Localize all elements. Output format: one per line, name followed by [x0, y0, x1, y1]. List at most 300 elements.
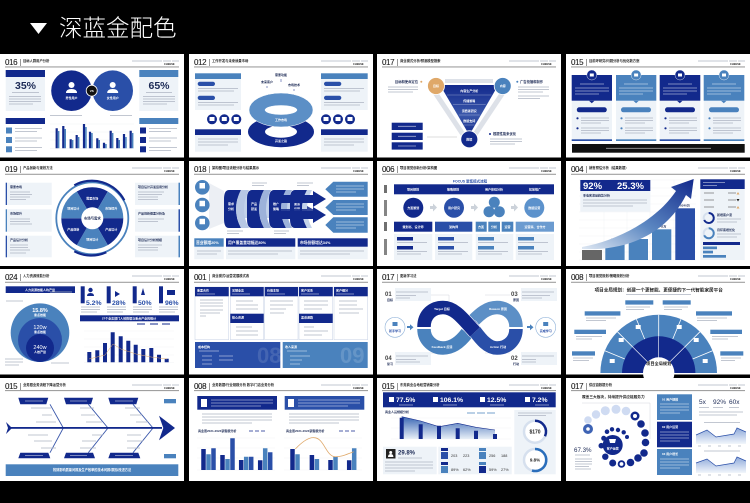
stats box: 25.3% [617, 181, 644, 192]
chart: right: 商业周2021-2024销售额分析 [286, 428, 324, 433]
header [382, 273, 556, 283]
metrics: 营业额增20% [196, 240, 219, 245]
drums: 分析 [228, 206, 234, 211]
step 02: 02 [511, 356, 518, 362]
triangle: 消费者研究 [462, 108, 477, 113]
revenue box: 收入来源 [285, 344, 297, 349]
step 01 [385, 288, 431, 302]
bars row: 架构师 [449, 224, 458, 229]
loop labels: Target 目标 [434, 306, 450, 311]
cards: right: 项目设计开发运用分析 [138, 184, 168, 189]
gridlines [579, 180, 696, 260]
header: CHEESE [164, 277, 175, 281]
stat: 67.3 [574, 447, 592, 469]
nested circles: 15.8% [32, 308, 48, 314]
wheel: 产品设计 [105, 226, 117, 231]
triangle [440, 85, 498, 135]
end node: 完成学习 [540, 328, 552, 333]
area chart: 商业人员规模分析 [385, 409, 409, 414]
drums: 策略 [273, 206, 279, 211]
triangle frame [431, 79, 507, 139]
header [194, 58, 368, 67]
list: right [139, 118, 178, 152]
metrics: 市场份额增达34% [300, 240, 331, 245]
donut panel [514, 410, 556, 474]
bar chart: 9240万 [680, 204, 690, 208]
drums: 渠道 [294, 201, 300, 206]
panel: 001 business model [189, 269, 373, 374]
column labels: 渠道通路 [301, 314, 313, 320]
header: CHEESE [730, 62, 741, 66]
step 04: 04 [385, 356, 392, 362]
panel: 015 dashboard [377, 378, 561, 481]
fishbone [6, 404, 175, 453]
end node [536, 317, 556, 337]
title [30, 15, 176, 41]
circle: female users: 女性用户 [107, 95, 119, 100]
panel: 016 user profile [0, 54, 184, 158]
wheel [56, 181, 128, 256]
stats: 60x [729, 399, 740, 406]
bar chart: 7242万 [657, 224, 666, 228]
nested circles: 120w [33, 325, 47, 331]
card: top left [195, 73, 241, 110]
text: left: 目标和使命定位 [395, 79, 419, 84]
funnel [209, 183, 224, 229]
row labels [384, 185, 387, 255]
wheel: 市场与需求 [84, 215, 101, 220]
column labels: 客户关系 [301, 288, 313, 292]
wheel: 市场提升 [105, 205, 117, 210]
drums: 运营 [294, 206, 300, 211]
circle: female users [92, 70, 133, 111]
stat tiles: 96% [165, 300, 179, 307]
header: CHEESE [164, 386, 175, 390]
nested circles: 重点效能 [34, 312, 46, 317]
column labels: 核心资源 [232, 314, 244, 320]
header [571, 58, 745, 67]
column 1 [572, 70, 612, 141]
column 2 [616, 70, 656, 141]
header: 008 [571, 273, 584, 282]
bar chart: 520万 [588, 246, 596, 250]
area chart [385, 409, 511, 439]
header bar: 项目规划 [407, 186, 419, 192]
panel: 017 infinity loop [377, 269, 561, 374]
highlight card: 29.8% [398, 450, 416, 456]
bars row: 运营商、合作方 [524, 224, 546, 229]
drums: 产品 [251, 201, 257, 206]
conclusion bar [6, 464, 178, 476]
header: 销售预估分析（结果数据） [589, 165, 629, 170]
header [194, 165, 368, 175]
triangle: 传播策略 [463, 98, 475, 103]
center node: 客户运营 [607, 446, 619, 450]
header: 目前环研究/问题分析与优化数方案 [589, 58, 640, 63]
text: left [388, 79, 422, 92]
header: 015 [382, 382, 395, 391]
header [571, 165, 745, 175]
header: 015 [571, 58, 584, 67]
heading bar: 人力资源效能人均产量 [25, 287, 55, 292]
dot spiral [598, 412, 649, 468]
card: steel bottom: 03 用户增长 [662, 451, 678, 456]
side panel: 新增客户流 [717, 212, 732, 217]
cards: right [135, 183, 180, 257]
card: male share: 35% [15, 80, 37, 92]
header: 017 [382, 58, 395, 67]
panel: 012 rings [189, 54, 373, 158]
card: navy middle [657, 422, 692, 447]
panel: 015 four columns [566, 54, 750, 158]
header [5, 58, 179, 67]
labels: ring tops [261, 72, 300, 91]
wheel: 项目设计 [67, 205, 79, 210]
header: 001 [194, 273, 207, 282]
panel: 018 process arrows [189, 161, 373, 266]
step 03: 原因 [513, 297, 519, 302]
callout: left [197, 396, 277, 410]
step 02: 行动 [513, 361, 519, 366]
header: 商业模式/运营发展模式表 [212, 273, 250, 278]
bar chart [84, 324, 174, 362]
triangle: 数据支持 [463, 118, 475, 123]
column labels: 价值主张 [267, 288, 279, 292]
bar chart: 4322万 [633, 234, 643, 238]
icon: down triangle [30, 23, 47, 34]
stat tiles: 50% [138, 300, 152, 307]
frame lines [417, 295, 510, 353]
header [5, 273, 179, 283]
list: left [6, 118, 45, 152]
metric grid: 89% [451, 468, 459, 472]
fan: 项目全局规划 [646, 360, 671, 367]
kpi bar: 12.5% [487, 397, 506, 404]
header: 东莞商业合地段营销量分析 [400, 382, 440, 387]
side panel: 月环客增长化 [717, 227, 735, 232]
cards: right: 产品创新概要分析及 [138, 210, 165, 216]
metric grid: 188 [501, 454, 507, 458]
circle: blue: 内容 [500, 83, 506, 88]
chart: right [284, 428, 362, 470]
column labels: 重要合作 [197, 288, 209, 292]
header [194, 273, 368, 283]
ring: lower [248, 116, 314, 147]
header: CHEESE [541, 169, 552, 173]
nested circles [11, 303, 69, 362]
heading: 深蓝金配色 [59, 15, 176, 41]
cost box: 成本结构 [198, 344, 210, 349]
notes [5, 292, 72, 365]
kpi bar: 106.1% [440, 397, 463, 404]
header: 024 [5, 273, 18, 282]
stat tiles [81, 286, 179, 312]
panel: 017 triangle [377, 54, 561, 158]
header: CHEESE [353, 169, 364, 173]
stat tiles: 28% [112, 300, 126, 307]
card: female share [139, 70, 178, 111]
header: CHEESE [541, 277, 552, 281]
arrows: gray [430, 204, 518, 212]
ring: lower: 开发之路 [275, 138, 287, 143]
header bar [394, 184, 554, 194]
metric grid: 27% [501, 468, 509, 472]
header: CHEESE [541, 62, 552, 66]
labels: ring tops: 未来客户 [261, 79, 273, 84]
panel: 008 bar charts [189, 378, 373, 481]
donut panel: 9.8% [530, 458, 540, 462]
cards: left: 市场提升 [10, 210, 22, 216]
buttons [392, 123, 423, 150]
text [202, 414, 359, 423]
arrow: growth [582, 179, 694, 249]
detail cells [394, 234, 554, 260]
header [382, 382, 556, 391]
header: 供应链数据分析 [589, 382, 613, 387]
header bar: 投放推广 [529, 186, 541, 192]
header [571, 273, 745, 283]
column 4 [704, 70, 744, 141]
step 04 [385, 352, 431, 366]
metric grid: 223 [463, 454, 469, 458]
arrows: small [407, 324, 534, 330]
loop labels: Feedback 反馈 [432, 344, 452, 349]
circle: male users [51, 70, 92, 111]
column labels: 客户细分 [336, 288, 348, 292]
card: navy middle: 02 用户运营 [662, 424, 678, 429]
header [571, 382, 745, 391]
stat tiles: 5.2% [86, 300, 102, 307]
chart: left [197, 428, 275, 470]
badge: vs [86, 85, 97, 96]
loop labels: Action 行动 [490, 344, 506, 349]
labels: ring tops: 需要功能 [275, 72, 287, 77]
cost box: 08 [257, 343, 281, 368]
panel: 004 sales growth [566, 161, 750, 266]
kpi bar: 7.2% [532, 397, 548, 404]
highlight card [383, 447, 437, 474]
text: right [516, 79, 549, 98]
circles: 数据运营 [528, 205, 540, 210]
header: 项目视觉规划/策略规划分析 [589, 273, 630, 278]
revenue box [283, 342, 368, 368]
cause text [28, 408, 148, 448]
panel: 019 market wheel [0, 161, 184, 266]
header: 017 [571, 382, 584, 391]
badge: vs: VS [90, 89, 94, 93]
panel: 015 fishbone [0, 378, 184, 481]
circles: inputs [195, 180, 210, 230]
header [382, 165, 556, 175]
metric grid: 203 [451, 454, 457, 458]
drums: 需求 [228, 201, 234, 206]
panel: 008 fan chart [566, 269, 750, 389]
nested circles: 重点效能 [34, 329, 46, 334]
start node [385, 317, 405, 337]
bars row [394, 222, 554, 232]
circles: 用户研究 [448, 205, 460, 210]
header: CHEESE [164, 169, 175, 173]
stats: 5x [699, 399, 707, 406]
column labels: 关键业务 [232, 288, 244, 292]
drums [224, 190, 312, 228]
header: 016 [5, 58, 18, 67]
ring: upper: 工作市场 [275, 117, 287, 122]
line chart: top [696, 422, 746, 446]
infinity loop [424, 308, 516, 348]
card: top right [321, 73, 368, 110]
kpi bar: 77.5% [396, 397, 415, 404]
step 04: 复习 [387, 361, 393, 366]
panel: 024 staffing [0, 269, 184, 374]
heading [595, 286, 723, 294]
bar chart [50, 116, 134, 148]
card: steel top: 01 用户规模 [662, 396, 678, 402]
header: CHEESE [353, 277, 364, 281]
bars row: 方案 [478, 224, 484, 229]
header bar: 用户体验分析 [485, 186, 503, 192]
header: 018 [194, 165, 207, 174]
labels: top and bottom [227, 183, 313, 234]
icons: right circles [321, 114, 355, 124]
header: CHEESE [353, 386, 364, 390]
card: male share [6, 70, 45, 111]
step 03 [511, 288, 557, 302]
label text [573, 307, 741, 360]
heading bar: chart: 27个业务部门人效数据与重点产业的统计 [102, 315, 156, 320]
bars row: 分析 [491, 224, 497, 229]
wheel: 产品创新 [67, 226, 79, 231]
circle: orange: 目标 [433, 83, 439, 88]
header: 006 [382, 165, 395, 174]
chart: left: 商业周2021-2024销售额分析 [198, 428, 236, 433]
canvas grid [195, 287, 368, 340]
circles: 方案策划 [407, 205, 419, 210]
nested circles: 240w [33, 345, 47, 351]
panel: 006 process table [377, 161, 561, 266]
header: CHEESE [164, 62, 175, 66]
stats: 92% [713, 399, 726, 406]
panel: 017 supply circles [566, 378, 750, 481]
arrows [281, 191, 326, 223]
loop labels [432, 306, 507, 349]
header: 017 [382, 273, 395, 282]
step 03: 03 [511, 292, 518, 298]
kpi bar [383, 392, 556, 407]
heading: FOCUS 聚焦模式流程 [453, 178, 488, 184]
text: bottom: 根据性能来优化 [493, 131, 517, 136]
step 01: 01 [385, 292, 392, 298]
metrics: 用户覆盖量增幅达80% [228, 240, 267, 245]
header [382, 58, 556, 67]
header: CHEESE [730, 386, 741, 390]
circle: navy [461, 131, 478, 148]
header: 项目视觉创新分析/架构图 [400, 165, 438, 170]
header [5, 382, 179, 391]
bar chart [582, 204, 695, 260]
heading: 覆盖三大板块，持续提升供应链服务力 [582, 394, 645, 399]
metric grid: 59% [489, 468, 497, 472]
bars row: 策划书、设计师 [402, 224, 424, 229]
header: CHEESE [730, 277, 741, 281]
header: 商业模式分析/预测模型搜索 [400, 58, 441, 63]
heading bar: chart [80, 315, 179, 321]
header: 012 [194, 58, 207, 67]
drums: 研发 [251, 206, 257, 211]
header: 目标人群用户分析 [23, 58, 50, 63]
header: 业务跟业务流程下降运营分析 [23, 382, 67, 387]
fan [600, 315, 717, 389]
text: bottom [489, 131, 522, 144]
header: 业务数据/行业规模分析 数字/门店业务分析 [212, 382, 275, 387]
circle: blue [494, 78, 511, 94]
cards: right: 项目设计分析规模 [138, 237, 162, 242]
header: 004 [571, 165, 584, 174]
loop labels: Reason 原因 [489, 306, 507, 311]
cause boxes [18, 398, 140, 458]
revenue box: 09 [340, 343, 364, 368]
nested circles: 人效产量 [34, 349, 46, 354]
header [5, 165, 179, 175]
line chart: bottom [696, 451, 746, 475]
donut panel: $170 [529, 430, 541, 436]
card: steel top [657, 394, 692, 420]
icons: left circles [207, 114, 241, 124]
header: CHEESE [730, 169, 741, 173]
center node [603, 435, 623, 455]
light circles [583, 405, 630, 434]
stat: 67.3: 67.3% [574, 447, 592, 454]
circle: orange [428, 78, 444, 94]
card: bottom right [321, 129, 368, 152]
column 3 [660, 70, 700, 141]
wheel: 需要市场 [86, 195, 98, 200]
labels: ring tops: 市场技术 [288, 82, 300, 87]
header bar: 策略规划 [447, 186, 459, 192]
stats box: 季电客流量趋势分析 [583, 192, 610, 198]
column text [200, 300, 363, 335]
cards: left: 需要市场 [10, 184, 22, 189]
circle: navy: 数据 [466, 136, 472, 141]
heading: 项目全局规划：创建一个更智能、更便捷的下一代智能家居平台 [595, 286, 723, 293]
card: bottom left [195, 129, 241, 152]
metric grid: 256 [489, 454, 495, 458]
header: CHEESE [541, 386, 552, 390]
header [194, 382, 368, 391]
cards: left [6, 183, 52, 257]
header: 更新学习法 [400, 273, 417, 278]
card: steel bottom [657, 449, 692, 475]
ring: upper [249, 93, 313, 127]
cards: left: 产品设计分析 [10, 237, 28, 242]
column labels [197, 288, 354, 320]
circles [403, 197, 544, 218]
triangle: 内容生产分析 [460, 88, 478, 93]
step 02 [511, 352, 557, 366]
frame [582, 403, 650, 439]
header: 015 [5, 382, 18, 391]
start node: 新手学习 [389, 328, 401, 333]
stats box: 92% [583, 181, 603, 192]
side tags [164, 399, 176, 458]
side panel [700, 179, 745, 260]
header: 人力资源效能分析 [23, 273, 50, 278]
header: 产品创新与规划方法 [23, 165, 53, 170]
text: right: 广告投播和制作 [520, 79, 544, 84]
connector [427, 136, 457, 138]
headers: columns [195, 287, 368, 323]
metric grid: 62% [463, 468, 471, 472]
